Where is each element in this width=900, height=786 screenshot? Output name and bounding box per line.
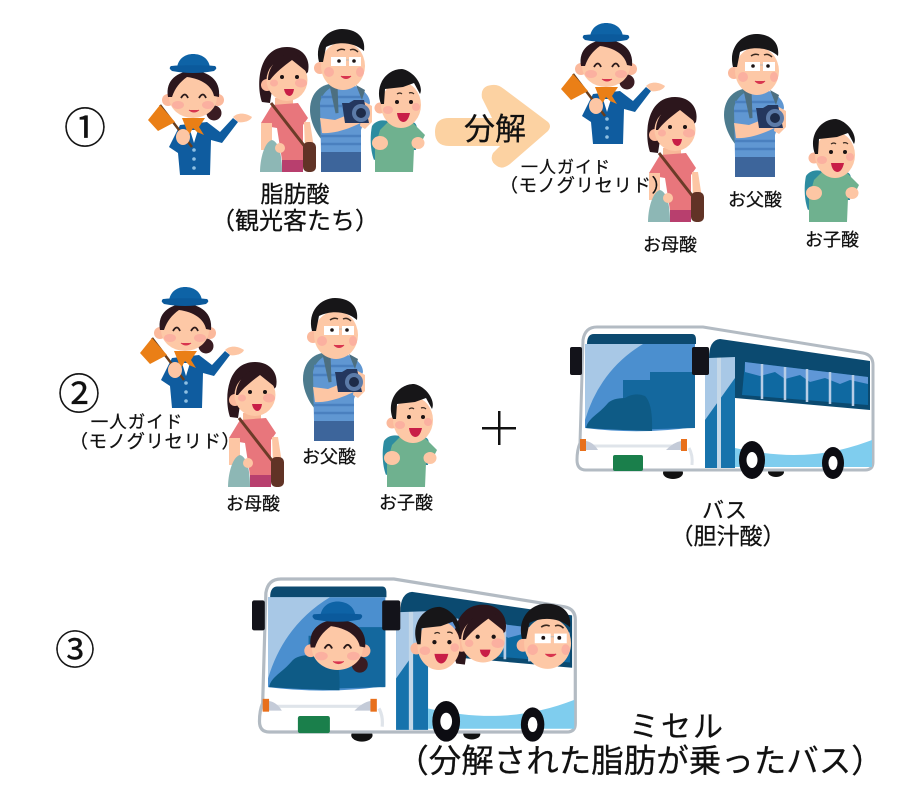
- row 2 guide: [140, 287, 244, 408]
- label: father acid row 2: お父酸: [302, 447, 356, 467]
- label: monoglyceride guide row 2: （モノグリセリド）: [69, 431, 241, 452]
- label: micelle: ミセル: [629, 711, 725, 744]
- driver head: [304, 601, 370, 673]
- label: monoglyceride guide row 2: 一人ガイド: [91, 412, 183, 432]
- label: monoglyceride guide: [499, 158, 671, 196]
- separated guide: [561, 23, 665, 144]
- label: bus bile acid: [670, 498, 786, 549]
- label: fatty acid: 脂肪酸: [260, 181, 330, 207]
- label: fatty acid: [211, 181, 379, 235]
- guide figure: [148, 54, 252, 175]
- father figure: [310, 29, 372, 172]
- label: monoglyceride guide row 2: [69, 412, 241, 452]
- bus: [570, 327, 873, 479]
- mother figure: [259, 47, 316, 172]
- label: micelle: （分解された脂肪が乗ったバス）: [396, 743, 884, 779]
- label: child acid: お子酸: [805, 230, 859, 250]
- label: mother acid: お母酸: [643, 235, 697, 255]
- bus body: [252, 579, 575, 742]
- bus wheels: [432, 701, 544, 742]
- mother passenger head: [453, 605, 506, 665]
- label: monoglyceride guide: （モノグリセリド）: [499, 175, 671, 196]
- row 2 boy: [383, 384, 437, 487]
- label: mother acid row 2: お母酸: [226, 494, 280, 514]
- separated boy: [805, 119, 859, 222]
- separated mother: [647, 97, 704, 222]
- label: bus bile acid: （胆汁酸）: [670, 523, 786, 549]
- step number 1: ①: [64, 105, 106, 152]
- label: micelle: [396, 711, 884, 779]
- micelle bus with passengers: [252, 579, 575, 742]
- boy figure: [371, 69, 425, 172]
- label: fatty acid: （観光客たち）: [211, 208, 379, 235]
- separated father: [724, 34, 786, 177]
- label: father acid: お父酸: [728, 190, 782, 210]
- row 2 father: [303, 298, 365, 441]
- plus sign: [482, 411, 516, 445]
- group: guide and tourists as fatty acid: [148, 29, 425, 175]
- step number 2: ②: [58, 371, 100, 418]
- arrow: decomposition: 分解: [464, 112, 526, 147]
- step number 3: ③: [55, 629, 95, 673]
- father passenger head: [517, 604, 571, 669]
- label: monoglyceride guide: 一人ガイド: [521, 158, 611, 177]
- row 2 mother: [227, 362, 284, 487]
- boy passenger head: [410, 607, 460, 670]
- arrow: decomposition: [435, 85, 550, 168]
- label: bus bile acid: バス: [702, 498, 748, 523]
- label: child acid row 2: お子酸: [379, 493, 433, 513]
